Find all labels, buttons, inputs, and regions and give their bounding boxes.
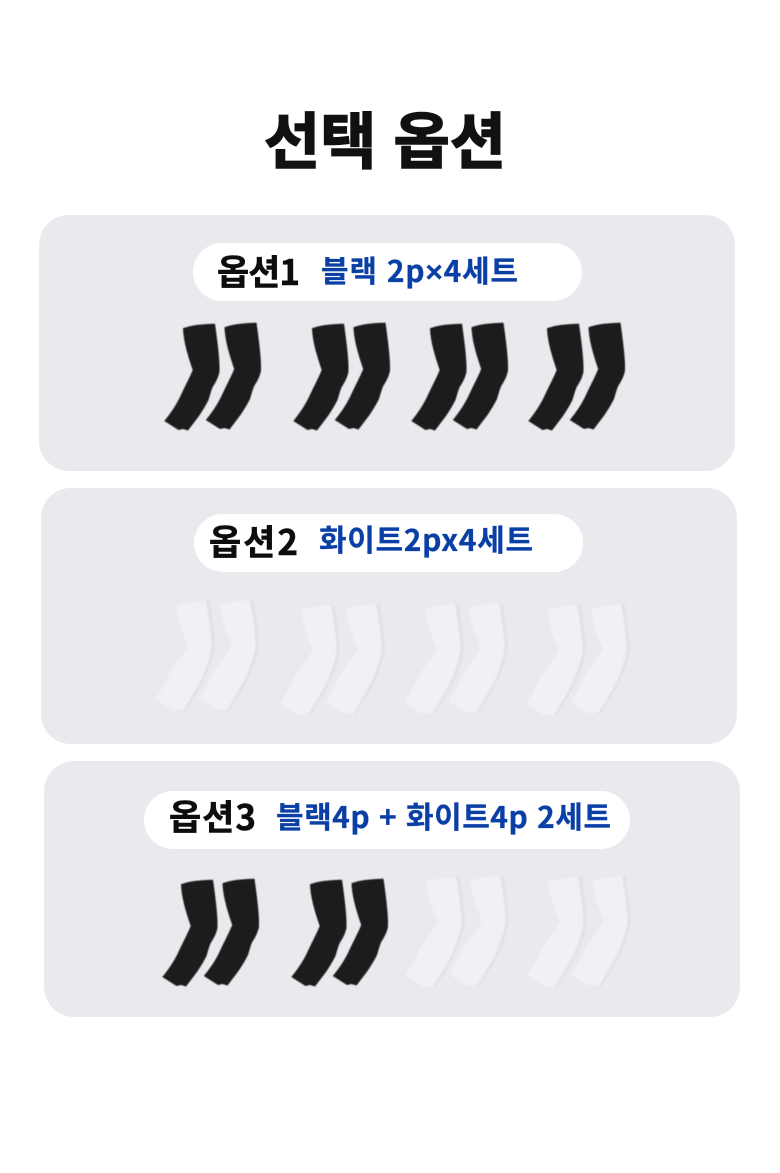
option 2 label pill: 옵션2 — [209, 515, 298, 566]
option 3 label pill — [144, 790, 630, 849]
option 3 label pill: 블랙4p + 화이트4p 2세트 — [276, 793, 611, 837]
option 1 black arm sleeves — [164, 323, 625, 430]
option 2 label pill: 화이트2px4세트 — [319, 516, 533, 560]
option 3 black and white arm sleeves — [162, 876, 631, 988]
panel: option 2 — [41, 488, 737, 744]
title: 선택 옵션 — [264, 92, 506, 181]
option 2 white arm sleeves — [155, 600, 630, 716]
option 3 label pill: 옵션3 — [169, 790, 256, 841]
option 1 label pill: 블랙 2p×4세트 — [321, 247, 518, 291]
option 2 label pill — [194, 514, 583, 572]
panel: option 1 — [39, 215, 735, 471]
option 1 label pill — [193, 243, 582, 301]
panel: option 3 — [44, 761, 740, 1017]
option 1 label pill: 옵션1 — [217, 245, 300, 296]
